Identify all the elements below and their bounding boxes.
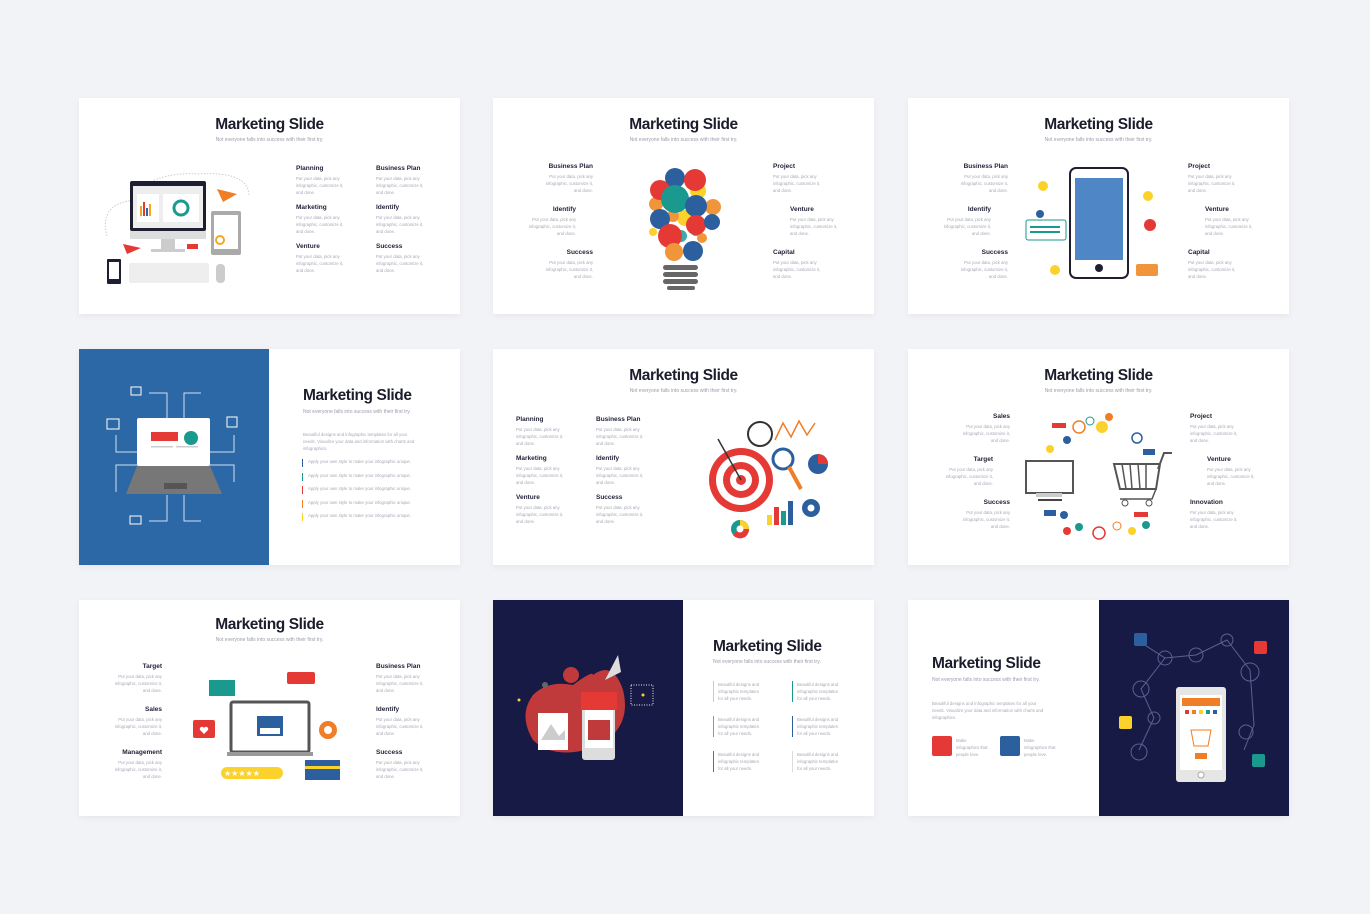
text: Venture: Venture	[296, 243, 320, 250]
illustration: target and charts	[709, 419, 828, 538]
text: Planning: and done.	[296, 190, 315, 195]
text: Target: Target	[143, 663, 162, 670]
text: Planning: and done.	[516, 441, 535, 446]
subtitle: Not everyone falls into success with their first try.	[216, 137, 323, 143]
text: Planning: Planning	[296, 165, 323, 172]
slide 8: dark shop: Beautiful designs and	[797, 717, 838, 722]
text: Business Plan: infographic, customize it,	[546, 181, 593, 186]
slide 8: dark shop: infographic templates	[718, 724, 759, 729]
text: Venture: and done.	[1207, 481, 1226, 486]
text: Capital	[1188, 249, 1235, 279]
text: Success	[376, 749, 456, 780]
slide 8: dark shop: infographic templates	[797, 759, 838, 764]
subtitle: Not everyone falls into success with their first try.	[216, 637, 323, 643]
text: Project: Project	[1188, 163, 1210, 170]
text: Planning: Planning	[516, 416, 543, 423]
list with coloured bars: Apply your own style to make your infographic unique.	[308, 459, 411, 464]
slide 8: dark shop: Beautiful designs and	[797, 752, 838, 757]
text: Sales: and done.	[991, 438, 1010, 443]
title: Marketing Slide	[932, 655, 1041, 672]
text: Identify: Identify	[376, 706, 399, 713]
text: Venture	[516, 494, 563, 524]
text: Innovation	[1190, 499, 1237, 529]
text: Venture: Venture	[1207, 456, 1231, 463]
list with coloured bars	[302, 459, 411, 521]
text: Business Plan: Business Plan	[596, 416, 640, 423]
text: Business Plan: infographic, customize it,	[961, 181, 1008, 186]
text: Success: infographic, customize it,	[596, 512, 643, 517]
text: Identify: infographic, customize it,	[376, 724, 423, 729]
subtitle: Not everyone falls into success with their first try.	[630, 137, 737, 143]
text: Success: infographic, customize it,	[376, 767, 423, 772]
text: Venture: infographic, customize it,	[296, 261, 343, 266]
text: Venture: and done.	[1205, 231, 1224, 236]
text: Success: Success	[982, 249, 1008, 256]
paragraph: infographics.	[303, 446, 327, 451]
illustration: computer devices	[104, 173, 250, 284]
text: Venture	[790, 206, 837, 236]
text: Project: and done.	[1188, 188, 1207, 193]
text: Marketing: Put your data, pick any	[516, 466, 560, 471]
text: Identify: Identify	[376, 204, 399, 211]
subtitle: Not everyone falls into success with their first try.	[713, 659, 821, 665]
text: Success: Success	[596, 494, 622, 501]
text: Success: infographic, customize it,	[546, 267, 593, 272]
text: Sales: and done.	[143, 731, 162, 736]
text: Identify: Put your data, pick any	[376, 215, 420, 220]
paragraph: Beautiful designs and infographic templates for all your	[932, 701, 1036, 706]
illustration: phone with emojis	[1026, 167, 1158, 279]
text: Project: and done.	[1190, 438, 1209, 443]
paragraph	[932, 700, 1043, 721]
text: Identify: Put your data, pick any	[947, 217, 991, 222]
text: Identify: and done.	[376, 731, 395, 736]
slide 3: phone	[908, 98, 1289, 314]
text: Management	[115, 749, 162, 779]
text: Marketing	[516, 455, 563, 485]
text: Business Plan: Business Plan	[549, 163, 593, 170]
text: Venture	[1207, 456, 1254, 486]
text: Target: Put your data, pick any	[118, 674, 162, 679]
text: Identify: infographic, customize it,	[944, 224, 991, 229]
text: Venture: Put your data, pick any	[1205, 217, 1249, 222]
icon items: Make	[1024, 738, 1035, 743]
slide 2: light bulb	[493, 98, 874, 314]
text: Success: and done.	[989, 274, 1008, 279]
paragraph	[303, 432, 414, 451]
title: Marketing Slide	[1044, 116, 1153, 133]
subtitle: Not everyone falls into success with their first try.	[1045, 388, 1152, 394]
slide 8: dark shop: for all your needs.	[797, 731, 831, 736]
text: Business Plan: Put your data, pick any	[596, 427, 640, 432]
text: Identify: infographic, customize it,	[376, 222, 423, 227]
text: Success: Put your data, pick any	[966, 510, 1010, 515]
text: Sales	[963, 413, 1010, 443]
slide 8: dark shop: infographic templates	[797, 724, 838, 729]
text: Innovation: Put your data, pick any	[1190, 510, 1234, 515]
text: Success: infographic, customize it,	[961, 267, 1008, 272]
list with coloured bars: Apply your own style to make your infographic unique.	[308, 513, 411, 518]
text: Innovation: and done.	[1190, 524, 1209, 529]
text: Business Plan: infographic, customize it,	[596, 434, 643, 439]
list with coloured bars: Apply your own style to make your infographic unique.	[308, 500, 411, 504]
text: Business Plan: and done.	[376, 688, 395, 693]
text: Venture: and done.	[790, 231, 809, 236]
text: Management: infographic, customize it,	[115, 767, 162, 772]
icon items: people love.	[956, 752, 979, 757]
illustration: bulb of icons	[649, 168, 721, 290]
subtitle: Not everyone falls into success with their first try.	[303, 409, 411, 415]
text: Venture: infographic, customize it,	[516, 512, 563, 517]
icon items: people love.	[1024, 752, 1047, 757]
text: Business Plan: and done.	[989, 188, 1008, 193]
text: Venture: infographic, customize it,	[1205, 224, 1252, 229]
text: Management: Put your data, pick any	[118, 760, 162, 765]
text: Target: Put your data, pick any	[949, 467, 993, 472]
text: Success: Success	[376, 243, 402, 250]
text: Sales	[115, 706, 162, 736]
text: Business Plan: Put your data, pick any	[549, 174, 593, 179]
panel: dark network illustration	[1099, 600, 1289, 816]
text: Project: and done.	[773, 188, 792, 193]
text: Planning: Put your data, pick any	[516, 427, 560, 432]
text: Success: infographic, customize it,	[376, 261, 423, 266]
grid of coloured-bar text items	[713, 680, 863, 682]
paragraph: needs. Visualize your data and information with charts and	[303, 439, 414, 444]
text: Marketing: Marketing	[296, 204, 327, 211]
text: Project: Project	[1190, 413, 1212, 420]
text: Project	[1190, 413, 1237, 443]
text: Success: infographic, customize it,	[963, 517, 1010, 522]
text: Identify: and done.	[557, 231, 576, 236]
text: Target	[946, 456, 993, 486]
title: Marketing Slide	[629, 367, 738, 384]
text: Business Plan	[376, 165, 423, 195]
panel: blue laptop illustration	[79, 349, 269, 565]
slide 8: dark shop: for all your needs.	[797, 696, 831, 701]
text: Business Plan: infographic, customize it,	[376, 681, 423, 686]
text: Venture: Venture	[516, 494, 540, 501]
text: Management: Management	[122, 749, 162, 756]
slide 5: target	[493, 349, 874, 565]
list with coloured bars: Apply your own style to make your infographic unique.	[308, 472, 411, 478]
text: Success	[546, 249, 593, 279]
slide 8: dark shop: for all your needs.	[718, 766, 752, 771]
subtitle: Not everyone falls into success with their first try.	[630, 388, 737, 394]
text: Business Plan: and done.	[574, 188, 593, 193]
illustration: laptop shop	[187, 668, 347, 788]
text: Identify: Identify	[596, 455, 619, 462]
title: Marketing Slide	[713, 638, 822, 655]
slide 8: dark shop	[493, 600, 874, 816]
slide 8: dark shop: infographic templates	[718, 689, 759, 694]
text: Venture: Venture	[1205, 206, 1229, 213]
text: Business Plan	[961, 163, 1008, 193]
text: Venture	[296, 243, 343, 273]
text: Identify: infographic, customize it,	[596, 473, 643, 478]
title: Marketing Slide	[629, 116, 738, 133]
text: Planning	[516, 416, 563, 446]
icon items: infographics that	[956, 745, 988, 750]
text: Innovation: infographic, customize it,	[1190, 517, 1237, 522]
text: Success: and done.	[376, 774, 395, 779]
text: Business Plan: Business Plan	[376, 663, 420, 670]
text: Success: Put your data, pick any	[964, 260, 1008, 265]
text: Venture: Venture	[790, 206, 814, 213]
text: Marketing: infographic, customize it,	[516, 473, 563, 478]
slide 9: network phone	[908, 600, 1289, 816]
text: Success: Put your data, pick any	[596, 505, 640, 510]
text: Planning: infographic, customize it,	[516, 434, 563, 439]
text: Success: Success	[567, 249, 593, 256]
text: Planning: infographic, customize it,	[296, 183, 343, 188]
text: Success: Put your data, pick any	[376, 254, 420, 259]
text: Target: and done.	[974, 481, 993, 486]
text: Sales: Sales	[993, 413, 1010, 420]
text: Identify	[376, 204, 423, 234]
text: Capital: Put your data, pick any	[1188, 260, 1232, 265]
text: Identify: and done.	[972, 231, 991, 236]
text: Project: infographic, customize it,	[1188, 181, 1235, 186]
text: Success: Put your data, pick any	[376, 760, 420, 765]
text: Venture: Put your data, pick any	[516, 505, 560, 510]
text: Capital: Put your data, pick any	[773, 260, 817, 265]
text: Business Plan	[376, 663, 456, 694]
slide 8: dark shop: Beautiful designs and	[718, 682, 759, 687]
slide 8: dark shop: for all your needs.	[718, 731, 752, 736]
text: Identify	[529, 206, 576, 236]
panel: dark illustration	[493, 600, 683, 816]
title: Marketing Slide	[215, 116, 324, 133]
icon items	[932, 736, 1082, 758]
slide 6: shopping cart	[908, 349, 1289, 565]
text: Success: and done.	[574, 274, 593, 279]
slide 7: shop laptop	[79, 600, 460, 816]
slide 8: dark shop: Beautiful designs and	[718, 717, 759, 722]
text: Identify: Put your data, pick any	[532, 217, 576, 222]
slide 8: dark shop: for all your needs.	[797, 766, 831, 771]
text: Project: infographic, customize it,	[1190, 431, 1237, 436]
paragraph: Beautiful designs and infographic templates for all your	[303, 432, 407, 437]
slide 4: blue laptop	[79, 349, 460, 565]
text: Planning	[296, 165, 343, 195]
text: Success	[376, 243, 423, 273]
text: Success	[961, 249, 1008, 279]
text: Target: infographic, customize it,	[115, 681, 162, 686]
subtitle: Not everyone falls into success with their first try.	[1045, 137, 1152, 143]
text: Identify: and done.	[376, 229, 395, 234]
text: Venture: Put your data, pick any	[1207, 467, 1251, 472]
text: Sales: infographic, customize it,	[963, 431, 1010, 436]
text: Venture: Put your data, pick any	[296, 254, 340, 259]
text: Business Plan: Business Plan	[964, 163, 1008, 170]
text: Business Plan: Put your data, pick any	[376, 176, 420, 181]
icon items: Make	[956, 738, 967, 743]
text: Project: infographic, customize it,	[773, 181, 820, 186]
text: Business Plan: Business Plan	[376, 165, 420, 172]
text: Marketing: infographic, customize it,	[296, 222, 343, 227]
text: Business Plan: Put your data, pick any	[964, 174, 1008, 179]
text: Marketing: and done.	[516, 480, 535, 485]
text: Management: and done.	[143, 774, 162, 779]
text: Business Plan: Put your data, pick any	[376, 674, 420, 679]
text: Business Plan: and done.	[596, 441, 615, 446]
text: Success: and done.	[376, 268, 395, 273]
text: Identify	[596, 455, 643, 485]
text: Venture: and done.	[516, 519, 535, 524]
slide 8: dark shop: Beautiful designs and	[718, 752, 759, 757]
text: Sales: infographic, customize it,	[115, 724, 162, 729]
text: Capital	[773, 249, 820, 279]
text: Project: Put your data, pick any	[1190, 424, 1234, 429]
text: Project	[1188, 163, 1235, 193]
text: Project: Put your data, pick any	[1188, 174, 1232, 179]
illustration: monitor, cart, icons ring	[1025, 413, 1172, 540]
text: Sales: Put your data, pick any	[118, 717, 162, 722]
text: Business Plan	[546, 163, 593, 193]
text: Identify: Put your data, pick any	[376, 717, 420, 722]
text: Success	[963, 499, 1010, 529]
paragraph: infographics.	[932, 715, 956, 720]
text: Marketing: and done.	[296, 229, 315, 234]
text: Identify: infographic, customize it,	[529, 224, 576, 229]
text: Sales: Put your data, pick any	[966, 424, 1010, 429]
text: Capital: Capital	[1188, 249, 1210, 256]
text: Success: Success	[376, 749, 402, 756]
paragraph: needs. Visualize your data and information with charts and	[932, 708, 1043, 713]
icon items: infographics that	[1024, 745, 1056, 750]
text: Capital: and done.	[773, 274, 792, 279]
text: Venture	[1205, 206, 1252, 236]
title: Marketing Slide	[303, 387, 412, 404]
title: Marketing Slide	[215, 616, 324, 633]
text: Success: Put your data, pick any	[549, 260, 593, 265]
slide 8: dark shop: Beautiful designs and	[797, 682, 838, 687]
text: Capital: infographic, customize it,	[1188, 267, 1235, 272]
text: Success	[596, 494, 643, 524]
text: Success: and done.	[596, 519, 615, 524]
text: Project	[773, 163, 820, 193]
text: Capital: and done.	[1188, 274, 1207, 279]
slide 8: dark shop: infographic templates	[718, 759, 759, 764]
text: Identify	[944, 206, 991, 236]
slide 1: computer	[79, 98, 460, 314]
text: Business Plan	[596, 416, 643, 446]
text: Marketing: Put your data, pick any	[296, 215, 340, 220]
text: Venture: infographic, customize it,	[1207, 474, 1254, 479]
slide 8: dark shop: infographic templates	[797, 689, 838, 694]
text: Identify: Identify	[553, 206, 576, 213]
text: Target: infographic, customize it,	[946, 474, 993, 479]
text: Marketing	[296, 204, 343, 234]
illustration: laptop shop: ★★★★★	[224, 769, 260, 778]
text: Planning: Put your data, pick any	[296, 176, 340, 181]
title: Marketing Slide	[1044, 367, 1153, 384]
text: Identify: and done.	[596, 480, 615, 485]
text: Target: Target	[974, 456, 993, 463]
text: Project: Project	[773, 163, 795, 170]
text: Innovation: Innovation	[1190, 499, 1223, 506]
text: Business Plan: infographic, customize it,	[376, 183, 423, 188]
text: Identify: Identify	[968, 206, 991, 213]
text: Capital: infographic, customize it,	[773, 267, 820, 272]
list with coloured bars: Apply your own style to make your infographic unique.	[308, 486, 411, 491]
text: Success: Success	[984, 499, 1010, 506]
text: Project: Put your data, pick any	[773, 174, 817, 179]
text: Target	[115, 663, 162, 693]
text: Success: and done.	[991, 524, 1010, 529]
text: Marketing: Marketing	[516, 455, 547, 462]
text: Target: and done.	[143, 688, 162, 693]
text: Venture: infographic, customize it,	[790, 224, 837, 229]
text: Venture: and done.	[296, 268, 315, 273]
text: Venture: Put your data, pick any	[790, 217, 834, 222]
subtitle: Not everyone falls into success with their first try.	[932, 677, 1040, 683]
text: Capital: Capital	[773, 249, 795, 256]
text: Identify: Put your data, pick any	[596, 466, 640, 471]
slide 8: dark shop: for all your needs.	[718, 696, 752, 701]
text: Sales: Sales	[145, 706, 162, 713]
text: Identify	[376, 706, 456, 737]
text: Business Plan: and done.	[376, 190, 395, 195]
